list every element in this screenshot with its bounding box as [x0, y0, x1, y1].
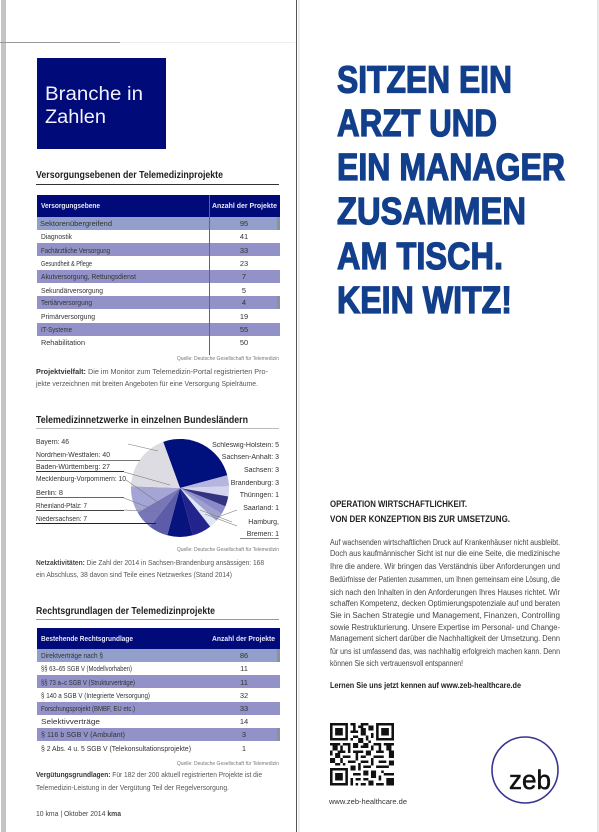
text block: Netzaktivitäten — [36, 558, 264, 579]
table: Versorgungsebenen — [37, 195, 280, 355]
table: Versorgungsebenen: 19 — [240, 312, 248, 321]
table: Versorgungsebenen: Rehabilitation — [41, 338, 85, 347]
source note: Quelle: Deutsche Gesellschaft für Telemedizin — [177, 356, 279, 362]
icon: QR code — [330, 723, 394, 786]
right labels — [212, 442, 279, 539]
source note: Quelle: Deutsche Gesellschaft für Telemedizin — [177, 547, 279, 553]
subheading: VON DER KONZEPTION BIS ZUR UMSETZUNG. — [330, 514, 510, 524]
body text: Doch aus kaufmännischer Sicht ist nur die eine Seite, die medizinische — [330, 549, 561, 558]
body text: Bedürfnisse der Patienten zusammen, um Ihnen gemeinsam eine Lösung, die — [330, 575, 560, 584]
table: Rechtsgrundlagen: 32 — [240, 691, 248, 700]
left labels — [36, 439, 156, 524]
headline: ARZT UND — [337, 103, 497, 145]
table: Rechtsgrundlagen: Bestehende Rechtsgrundlage — [41, 634, 133, 643]
table: Versorgungsebenen: Primärversorgung — [41, 312, 95, 321]
table: Versorgungsebenen: Versorgungsebene — [41, 201, 100, 210]
website link: www.zeb-healthcare.de — [328, 797, 407, 806]
table: Rechtsgrundlagen: Direktverträge nach § — [41, 651, 103, 660]
table: Versorgungsebenen: Anzahl der Projekte — [212, 201, 277, 210]
table: Rechtsgrundlagen: § 116 b SGB V (Ambulant) — [41, 730, 125, 739]
headline: SITZEN EIN — [337, 60, 512, 102]
heading box: Branche in Zahlen: Zahlen — [45, 107, 106, 128]
table: Rechtsgrundlagen: § 140 a SGB V (Integrierte Versorgung) — [41, 691, 150, 700]
text block: Projektvielfalt: Projektvielfalt: Die im Monitor zum Telemedizin-Portal registrierten Pro- — [36, 367, 268, 376]
text block: Netzaktivitäten: ein Abschluss, 38 davon sind Teile eines Netzwerkes (Stand 2014) — [36, 570, 232, 579]
left labels: Baden-Württemberg: 27 — [36, 464, 110, 471]
body text: Sie in Sachen Strategie und Management, Finanzen, Controlling — [330, 611, 560, 620]
right labels: Saarland: 1 — [243, 505, 279, 512]
table: Versorgungsebenen: Diagnostik — [41, 232, 72, 241]
panel: Telemedizinnetzwerke — [36, 415, 279, 579]
right labels: Schleswig-Holstein: 5 — [212, 442, 279, 449]
table: Versorgungsebenen: 95 — [240, 219, 248, 228]
body text — [330, 538, 561, 668]
table: Rechtsgrundlagen: Anzahl der Projekte — [212, 634, 275, 643]
right labels: Hamburg, — [248, 519, 279, 526]
text block: Netzaktivitäten: Netzaktivitäten: Die Zahl der 2014 in Sachsen-Brandenburg ansässigen: 168 — [36, 558, 264, 567]
table: Versorgungsebenen: Gesundheit & Pflege — [41, 259, 92, 268]
left labels: Berlin: 8 — [36, 490, 63, 497]
headline: KEIN WITZ! — [337, 280, 512, 322]
heading: Rechtsgrundlagen: Rechtsgrundlagen der Telemedizinprojekte — [36, 606, 215, 617]
right labels: Sachsen: 3 — [244, 467, 279, 474]
table: Rechtsgrundlagen: 11 — [240, 678, 248, 687]
heading box: Branche in Zahlen: Branche in — [45, 84, 143, 105]
table: Rechtsgrundlagen: 11 — [240, 664, 248, 673]
body text: schaffen Kompetenz, decken Optimierungspotenziale auf und beraten — [330, 599, 560, 608]
table: Versorgungsebenen: Tertiärversorgung — [41, 298, 92, 307]
table: Rechtsgrundlagen — [37, 628, 280, 753]
table: Versorgungsebenen: 4 — [242, 298, 246, 307]
body text: Management sichert darüber die Nachhaltigkeit der Umsetzung. Denn — [330, 634, 560, 643]
pie chart — [131, 439, 229, 537]
pie leader lines — [124, 444, 237, 526]
right labels: Sachsen-Anhalt: 3 — [222, 454, 279, 461]
call to action: Lernen Sie uns jetzt kennen auf www.zeb-healthcare.de — [330, 680, 521, 690]
table: Rechtsgrundlagen: Selektivverträge — [41, 717, 100, 726]
source note: Quelle: Deutsche Gesellschaft für Telemedizin — [177, 761, 279, 767]
text block: Vergütungsgrundlagen — [36, 770, 262, 792]
table: Versorgungsebenen: 55 — [240, 325, 248, 334]
body text: sowie Restrukturierung. Unsere Expertise im Personal- und Change- — [330, 623, 560, 632]
panel: Versorgungsebenen — [35, 170, 280, 388]
table: Versorgungsebenen: Sektorenübergreifend — [40, 219, 112, 228]
logo: zeb — [492, 737, 558, 803]
text block: Vergütungsgrundlagen: Vergütungsgrundlagen: Für 182 der 200 aktuell registrierten Projekte ist die — [36, 770, 262, 779]
left labels: Nordrhein-Westfalen: 40 — [36, 452, 110, 459]
headline: ZUSAMMEN — [337, 191, 526, 233]
left labels: Niedersachsen: 7 — [36, 516, 87, 523]
right labels: Bremen: 1 — [247, 531, 279, 538]
heading: Telemedizinnetzwerke: Telemedizinnetzwerke in einzelnen Bundesländern — [36, 415, 248, 426]
table: Rechtsgrundlagen: 14 — [240, 717, 248, 726]
table: Versorgungsebenen: 33 — [240, 246, 248, 255]
table: Rechtsgrundlagen: §§ 73 a–c SGB V (Strukturverträge) — [41, 678, 135, 687]
text block: Projektvielfalt — [35, 367, 268, 388]
headline — [337, 60, 565, 322]
table: Rechtsgrundlagen: 1 — [242, 744, 246, 753]
table: Rechtsgrundlagen: § 2 Abs. 4 u. 5 SGB V (Telekonsultationsprojekte) — [41, 744, 191, 753]
body text: können Sie sich vertrauensvoll entspannen! — [330, 659, 463, 668]
headline: AM TISCH. — [337, 236, 503, 278]
table: Versorgungsebenen: 41 — [240, 232, 248, 241]
left labels: Rheinland-Pfalz: 7 — [36, 503, 87, 510]
panel: Rechtsgrundlagen — [36, 606, 280, 792]
text block: Projektvielfalt: jekte verzeichnen mit breiten Angeboten für eine Versorgung Spielräume. — [35, 379, 258, 388]
table: Versorgungsebenen: 50 — [240, 338, 248, 347]
table: Versorgungsebenen: Akutversorgung, Rettungsdienst — [41, 272, 137, 281]
table: Rechtsgrundlagen: 86 — [240, 651, 248, 660]
table: Rechtsgrundlagen: Forschungsprojekt (BMBF, EU etc.) — [41, 704, 135, 713]
body text: für uns ist umfassend das, was nachhaltig erfolgreich machen kann. Denn — [330, 647, 560, 656]
right labels: Brandenburg: 3 — [231, 480, 279, 487]
right labels: Thüringen: 1 — [240, 492, 279, 499]
subheading: OPERATION WIRTSCHAFTLICHKEIT. — [330, 499, 467, 509]
body text: Auf wachsenden wirtschaftlichen Druck auf Krankenhäuser nicht ausbleibt. — [330, 538, 560, 547]
body text: sich nach den Inhalten in den Anforderungen Ihres Hauses richtet. Wir — [330, 588, 560, 597]
table: Rechtsgrundlagen: §§ 63–65 SGB V (Modellvorhaben) — [41, 664, 132, 673]
table: Versorgungsebenen: 5 — [242, 286, 246, 295]
heading: Versorgungsebenen: Versorgungsebenen der Telemedizinprojekte — [36, 170, 223, 181]
table: Versorgungsebenen: 7 — [242, 272, 246, 281]
table: Versorgungsebenen: Fachärztliche Versorgung — [41, 246, 110, 255]
heading box: Branche in Zahlen — [37, 58, 166, 149]
page footer: 10 kma | Oktober 2014 kma — [36, 809, 122, 818]
table: Rechtsgrundlagen: 33 — [240, 704, 248, 713]
subheading — [330, 499, 510, 524]
left labels: Mecklenburg-Vorpommern: 10 — [36, 476, 126, 483]
left labels: Bayern: 46 — [36, 439, 69, 446]
table: Versorgungsebenen: 23 — [240, 259, 248, 268]
table: Rechtsgrundlagen: 3 — [242, 730, 246, 739]
table: Versorgungsebenen: Sekundärversorgung — [41, 286, 103, 295]
logo: zeb: zeb — [509, 765, 551, 795]
text block: Vergütungsgrundlagen: Telemedizin-Leistung in der Vergütung Teil der Regelversorgung. — [36, 783, 229, 792]
body text: Ihre die andere. Wir bringen das Verständnis über Anforderungen und — [330, 562, 560, 571]
table: Versorgungsebenen: IT-Systeme — [41, 325, 72, 334]
